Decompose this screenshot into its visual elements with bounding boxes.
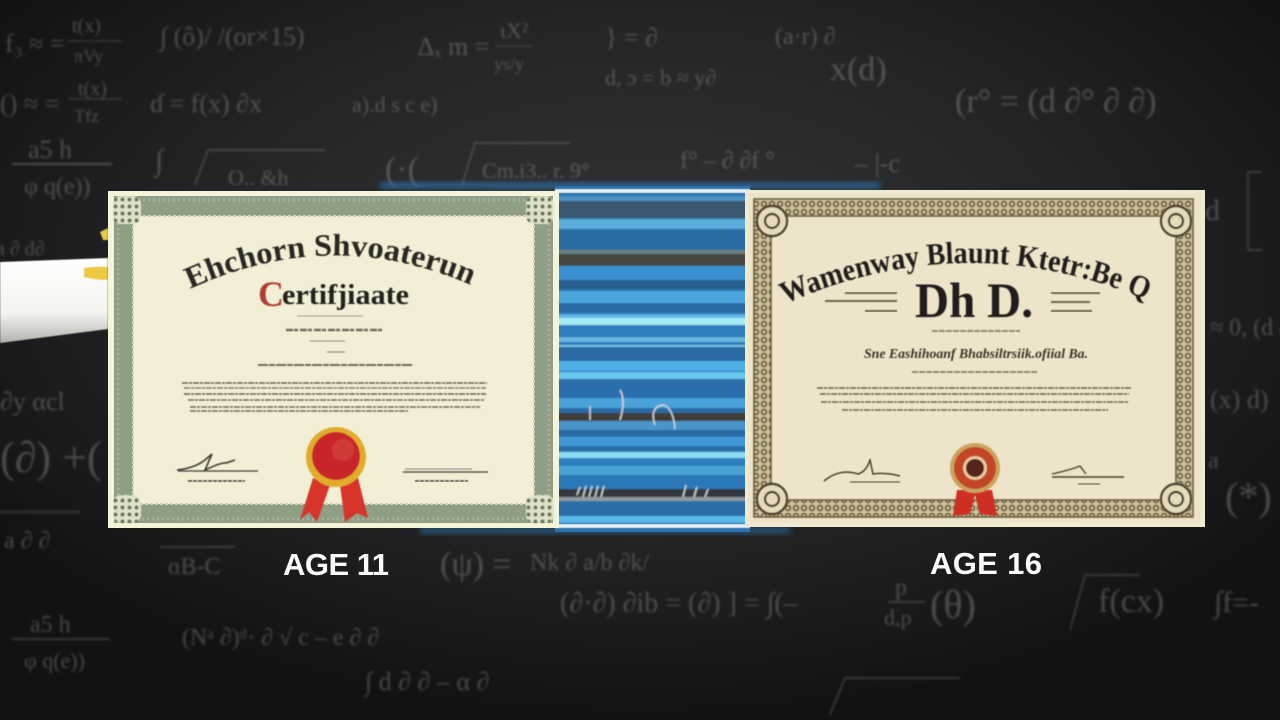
chalk equations: (x) d) (1210, 385, 1268, 414)
chalk equations: ∫ (153, 144, 165, 179)
chalk equations: O.. &h (228, 165, 288, 190)
certificate subtitle: Sne Eashihoanf Bhabsiltrsiik.ofiial Ba. (864, 347, 1088, 362)
signature left (177, 454, 258, 481)
certificate body lines (182, 316, 487, 411)
panel: age 11 certificate (108, 191, 559, 528)
chalk equations: d,p (884, 605, 912, 630)
certificate heading: Wamenway Blaunt Ktetr:Be Q (777, 241, 1150, 304)
chalk equations: () ≈ = (0, 89, 59, 118)
chalk equations: f° – ∂ ∂f ° (680, 148, 775, 174)
chalk equations: (r° = (d ∂° ∂ ∂) (955, 83, 1157, 120)
signature right (1052, 466, 1124, 484)
chalk equations: φ q(e)) (24, 174, 90, 200)
chalk equations: ∆ₓ m = (418, 32, 489, 61)
chalk equations: ∂y αcl (0, 387, 65, 416)
chalk equations: a5 h (30, 612, 71, 638)
chalk equations: (θ) (930, 582, 976, 627)
chalk equations: (a·r) ∂ (775, 24, 835, 50)
chalk equations: Cm.i3.. r. 9° (482, 158, 590, 183)
chalk equations: φ q(e)) (24, 648, 85, 673)
chalk equations: ɗ = f(x) ∂x (150, 89, 262, 118)
degree flourishes (825, 293, 1100, 311)
chalk equations: ∫f=- (1212, 586, 1259, 621)
certificate heading: C (258, 274, 284, 314)
chalk equations: t(x) (72, 15, 101, 37)
panel: blue speed transition (380, 183, 880, 533)
chalk equations: } = ∂ (605, 23, 658, 52)
chalk equations: f₃ ≈ = (5, 29, 65, 58)
label: age 16: AGE 16 (930, 546, 1042, 581)
chalk pen at left (0, 228, 108, 343)
certificate heading: Ehchorn Shvoaterun (182, 233, 474, 290)
chalk equations: (∂·∂) ∂ib = (∂) ] = ∫(– (560, 588, 799, 620)
panel: age 16 certificate (745, 190, 1205, 527)
certificate body lines (817, 331, 1131, 410)
chalk equations: (Nᵃ ∂)ᵈ· ∂ √ c – e ∂ ∂ (182, 625, 379, 651)
chalk equations: d (1205, 194, 1220, 227)
certificate heading: Dh D. (915, 272, 1033, 328)
chalk equations: p (895, 575, 907, 601)
chalk equations: a ∂ ∂ (4, 528, 50, 554)
chalk equations: a).d s c e) (352, 92, 438, 117)
corner ornaments (113, 196, 554, 523)
chalk equations: (ψ) = (440, 546, 512, 583)
chalk equations: (∂) +( (0, 433, 102, 482)
signature right (403, 469, 488, 481)
chalk equations: πVy (74, 46, 103, 66)
chalk equations: Nk ∂ a/b ∂k/ (530, 550, 649, 576)
green border (114, 196, 553, 523)
signature left (824, 460, 900, 482)
chalk equations: ɑB-C (168, 554, 221, 580)
chalk equations: ∫ d ∂ ∂ – α ∂ (363, 667, 489, 697)
chalk equations: (*) (1225, 474, 1272, 519)
corner ornaments (757, 206, 1191, 514)
red rosette seal (950, 443, 1000, 516)
chalk equations: a (1208, 448, 1219, 474)
chalk equations: d, ɔ = b ≈ y∂ (605, 65, 716, 90)
chalk equations: ∫ (ô)/ /(or×15) (158, 22, 305, 52)
chalk equations: ys/y (494, 54, 524, 74)
certificate heading: ertifjiaate (282, 279, 409, 311)
chalk equations: a5 h (28, 135, 72, 164)
ornamental border (754, 199, 1193, 517)
red ribbon seal (300, 427, 368, 522)
chalk equations: (·( (385, 151, 419, 188)
label: age 11: AGE 11 (283, 547, 389, 582)
chalk equations: Tfz (74, 106, 99, 126)
chalk equations: ιX² (500, 18, 529, 43)
chalk equations: f(cx) (1098, 583, 1164, 620)
chalk equations: – |-c (854, 149, 900, 178)
chalk equations: t(x) (78, 78, 107, 100)
chalk equations: x(d) (830, 51, 887, 88)
